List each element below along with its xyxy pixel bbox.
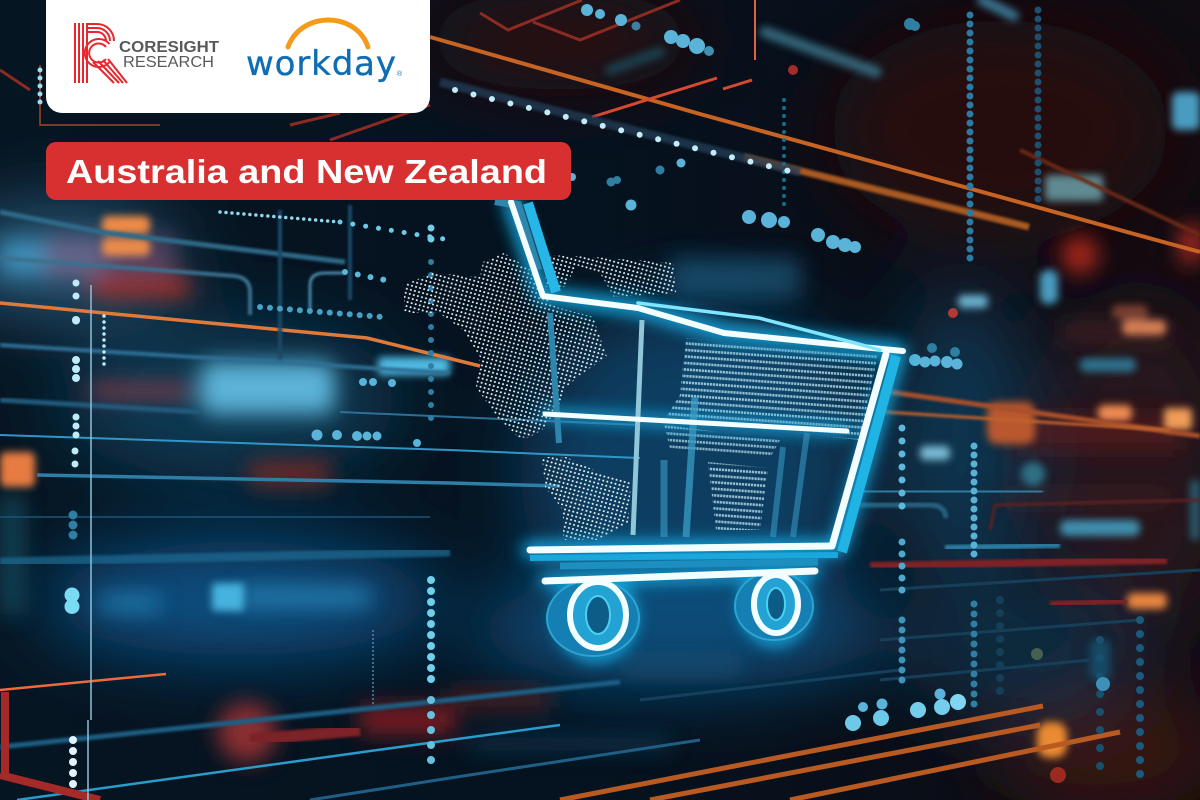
region banner [46,142,571,200]
cart frame bright core [511,202,903,581]
cart frame glow [511,202,898,655]
logo panel [46,0,430,113]
logo text: Coresight Research: CORESIGHT [119,39,219,56]
logos: Coresight Research and Workday [74,18,403,84]
registered mark: ® [397,70,403,78]
logo mark: Coresight R [75,23,127,83]
dotted world map inside cart [404,253,878,540]
cart wheels [570,575,798,648]
blurred light blocks [0,225,1200,762]
logo: Workday arc [288,20,368,47]
bokeh dots [312,4,1110,783]
logo text: Coresight Research [119,39,219,71]
logo text: Coresight Research: RESEARCH [123,54,214,71]
logo text: Workday: workday [246,44,396,84]
cart uprights and depth bands [495,201,896,656]
banner text: Australia and New Zealand [66,153,547,190]
